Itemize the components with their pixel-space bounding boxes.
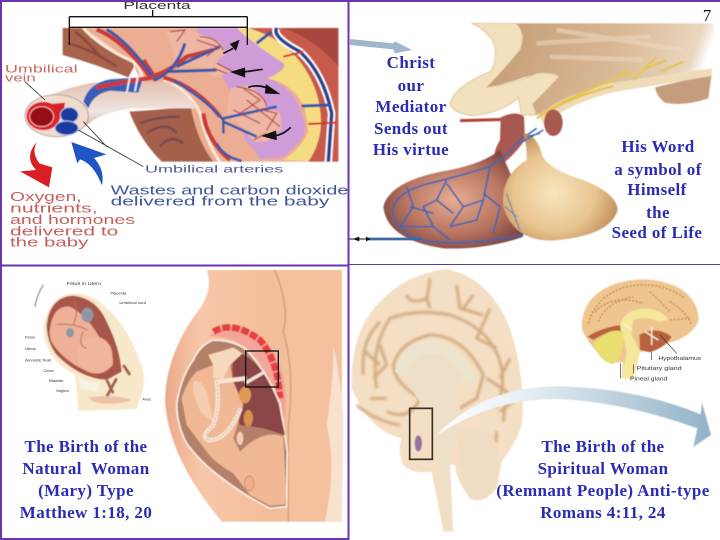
small brain illustration bbox=[582, 279, 698, 378]
text: Birth of the Spiritual Woman: The Birth of the bbox=[541, 437, 665, 456]
panel: natural birth bbox=[25, 270, 343, 522]
text: His Word: the bbox=[646, 203, 670, 222]
large brain illustration bbox=[352, 269, 523, 532]
small brain labels: Pituitary gland bbox=[637, 366, 682, 372]
text: His Word: a symbol of bbox=[614, 160, 702, 179]
small brain leader lines bbox=[621, 335, 677, 378]
text: Birth of the Spiritual Woman: Romans 4:11, 24 bbox=[540, 503, 666, 522]
fetus diagram labels bbox=[25, 281, 151, 402]
text: Birth of the Natural Woman: Natural Woman bbox=[22, 459, 150, 478]
pregnant body illustration bbox=[165, 270, 343, 522]
panel: pituitary gland bbox=[347, 23, 715, 249]
placenta cross-section illustration bbox=[25, 28, 338, 162]
text: His Word: Seed of Life bbox=[612, 223, 702, 242]
text: Christ our Mediator: our bbox=[398, 76, 424, 95]
fetus diagram labels: Cervix bbox=[43, 368, 54, 373]
curved arrow bbox=[436, 386, 711, 447]
text: Christ our Mediator: Christ bbox=[387, 53, 435, 72]
text: Christ our Mediator: Mediator bbox=[375, 97, 447, 116]
upper right panel bottom rule bbox=[349, 264, 720, 266]
text: Birth of the Natural Woman: Matthew 1:18, 20 bbox=[20, 503, 152, 522]
fetus diagram labels: Amniotic fluid bbox=[25, 358, 51, 363]
icon: red arrow bbox=[20, 141, 52, 187]
panel: placenta diagram bbox=[5, 0, 348, 250]
fetus diagram labels: Vagina bbox=[56, 388, 69, 393]
fetus diagram labels: Bladder bbox=[49, 378, 64, 383]
page number: 7 bbox=[703, 6, 712, 25]
pituitary illustration bbox=[383, 23, 715, 249]
text: His Word: Himself bbox=[627, 180, 687, 199]
label: umbilical arteries: Umbilical arteries bbox=[145, 165, 283, 176]
icon: blue arrow bbox=[71, 142, 106, 185]
label: oxygen: delivered to bbox=[10, 223, 118, 238]
pointer lines bbox=[25, 82, 143, 167]
panel: spiritual birth bbox=[352, 269, 711, 532]
fetus diagram labels: Fetus in Utero bbox=[67, 281, 101, 286]
label: umbilical vein: Umbilical bbox=[5, 64, 78, 76]
label: oxygen: and hormones bbox=[10, 212, 136, 227]
fetus diagram labels: Placenta bbox=[110, 291, 127, 296]
black flow arrows bbox=[223, 40, 291, 140]
text: Birth of the Spiritual Woman: Spiritual Woman bbox=[538, 459, 669, 478]
text: Christ our Mediator: His virtue bbox=[373, 140, 449, 159]
fetus diagram labels: Umbilical cord bbox=[119, 300, 146, 305]
small brain labels: Hypothalamus bbox=[658, 356, 701, 362]
text: Birth of the Spiritual Woman: (Remnant People) Anti-type bbox=[496, 481, 710, 500]
text: Christ our Mediator: Sends out bbox=[374, 119, 448, 138]
small fetus in utero illustration bbox=[35, 285, 144, 411]
fetus diagram labels: Fetus bbox=[25, 335, 35, 340]
villi lobes bbox=[167, 29, 230, 78]
label: oxygen: the baby bbox=[10, 235, 89, 250]
fetus diagram labels: Uterus bbox=[25, 346, 36, 351]
icon: small outflow arrow bbox=[347, 237, 422, 241]
label: oxygen: Oxygen, bbox=[10, 189, 82, 204]
label: umbilical vein: vein bbox=[5, 73, 36, 85]
label: wastes: delivered from the baby bbox=[111, 194, 330, 209]
fetus diagram labels: Anus bbox=[142, 397, 151, 402]
label: placenta: Placenta bbox=[123, 0, 192, 12]
label: oxygen: nutrients, bbox=[10, 200, 98, 215]
icon: blue-grey arrow bbox=[350, 39, 412, 53]
text: His Word: His Word bbox=[621, 137, 695, 156]
small brain labels: Pineal gland bbox=[630, 376, 667, 382]
bracket lines bbox=[69, 10, 247, 45]
inset box bbox=[246, 351, 278, 387]
text: Birth of the Natural Woman: (Mary) Type bbox=[38, 481, 134, 500]
small brain labels bbox=[630, 356, 701, 382]
inset box bbox=[410, 408, 432, 459]
text: Birth of the Natural Woman: The Birth of the bbox=[24, 437, 148, 456]
label: wastes: Wastes and carbon dioxide bbox=[111, 183, 348, 198]
